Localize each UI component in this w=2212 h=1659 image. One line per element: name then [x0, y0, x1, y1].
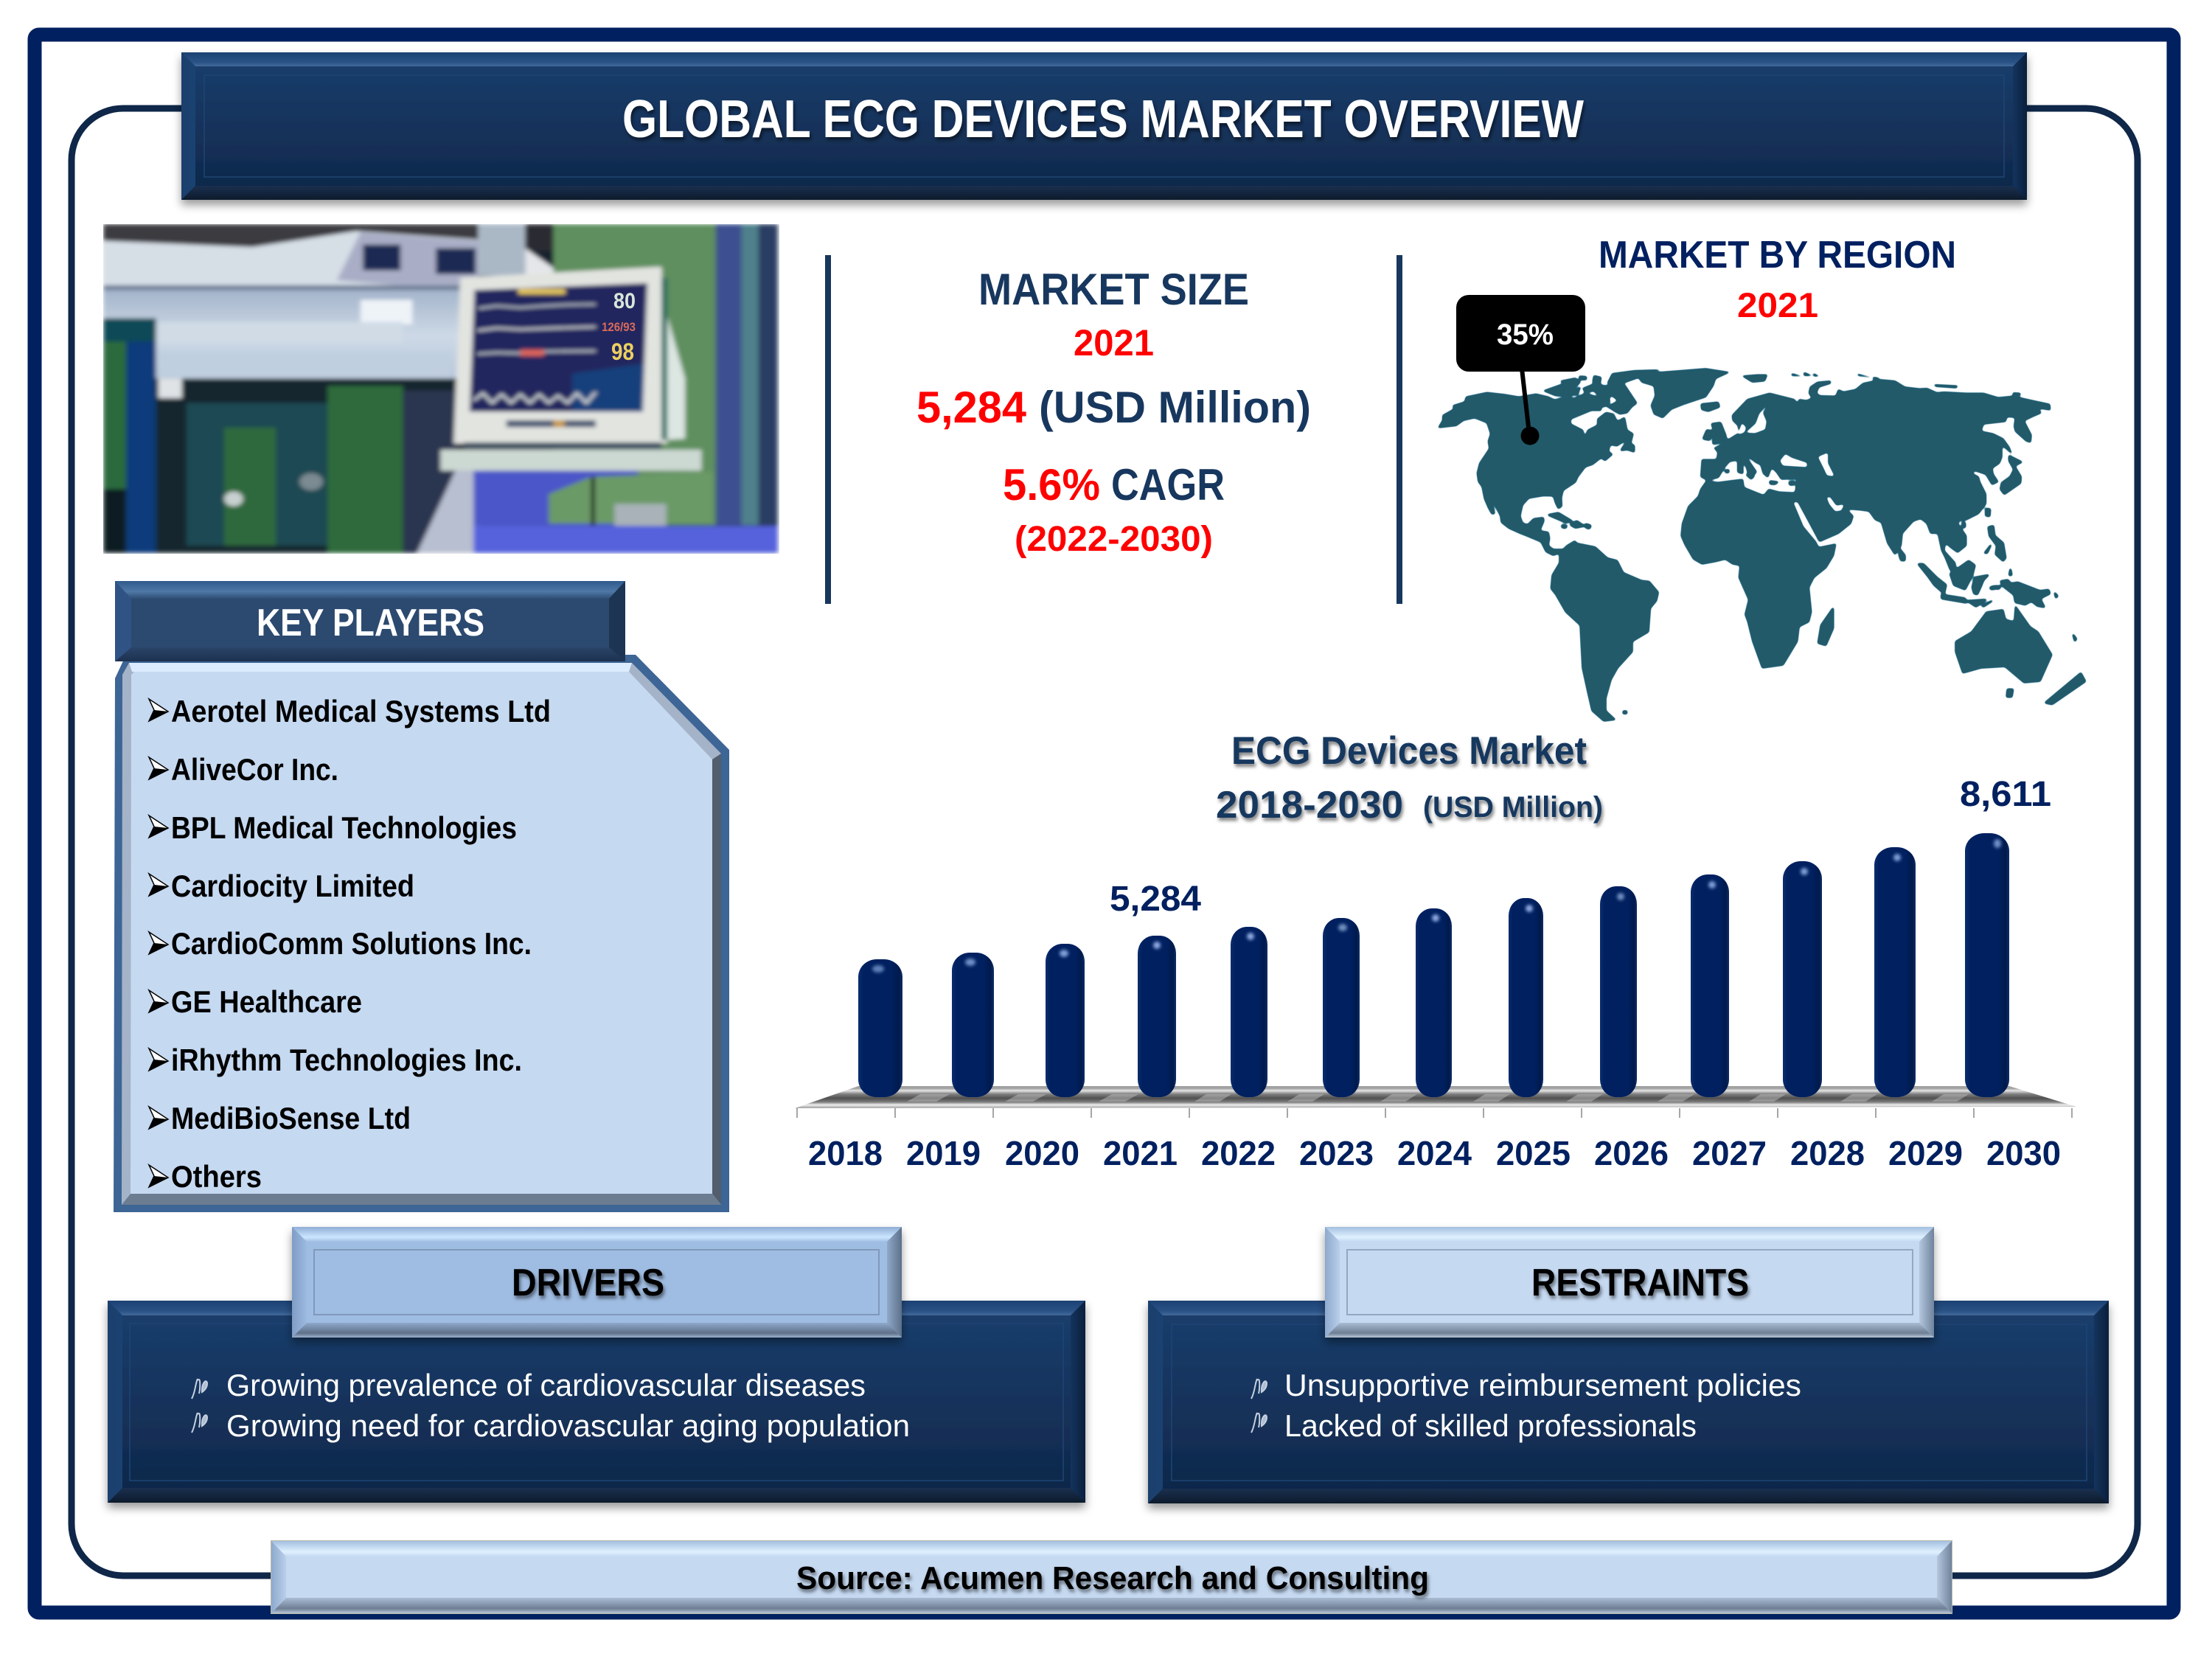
player 5: CardioComm Solutions Inc.	[171, 926, 532, 961]
title banner	[181, 52, 2027, 200]
bar 2018	[858, 959, 902, 1097]
callout pointer	[1520, 369, 1540, 445]
land: eurasia	[1701, 380, 2051, 573]
bar 2021	[1138, 936, 1176, 1097]
panel: drivers	[108, 1301, 1085, 1503]
world map	[1423, 361, 2107, 736]
year: 2021	[1074, 322, 1154, 364]
year axis labels: 2021	[1103, 1134, 1178, 1172]
source bar	[271, 1541, 1952, 1613]
player 3: BPL Medical Technologies	[171, 810, 517, 845]
year axis labels: 2026	[1594, 1134, 1669, 1172]
panel heading: key players	[115, 581, 625, 661]
monitor readings: 98	[611, 338, 634, 365]
restraints text 2: Lacked of skilled professionals	[1284, 1408, 1697, 1443]
bar 2029	[1874, 847, 1916, 1097]
bar 2019	[952, 953, 994, 1097]
restraints text 1: Unsupportive reimbursement policies	[1284, 1368, 1801, 1402]
restraints bullet 1	[1251, 1379, 1267, 1399]
water: inland seas	[1610, 407, 1843, 546]
bar 2026	[1600, 886, 1637, 1097]
title text: GLOBAL ECG DEVICES MARKET OVERVIEW	[622, 90, 1584, 149]
panel heading: restraints	[1325, 1227, 1934, 1338]
monitor readings: 126/93	[602, 320, 636, 334]
bar chart	[795, 775, 2076, 1172]
bar 2020	[1046, 944, 1085, 1097]
value label 2021: 5,284	[1110, 880, 1201, 919]
bar 2027	[1691, 874, 1729, 1097]
bar 2023	[1323, 918, 1360, 1097]
divider left	[825, 255, 831, 604]
photo: patient monitor	[103, 224, 778, 553]
land: south america	[1551, 540, 1658, 721]
player 7: iRhythm Technologies Inc.	[171, 1043, 522, 1077]
year axis labels: 2025	[1496, 1134, 1571, 1172]
callout value: 35%	[1497, 319, 1554, 351]
year axis labels: 2030	[1986, 1134, 2061, 1172]
land: australia	[1955, 606, 2052, 683]
chart title line 2: 2018-2030	[1216, 784, 1403, 827]
drivers text: DRIVERS	[512, 1262, 664, 1304]
panel: restraints	[1148, 1301, 2109, 1503]
heading: market by region: MARKET BY REGION	[1599, 234, 1956, 276]
year axis labels: 2029	[1888, 1134, 1963, 1172]
year axis labels	[808, 1134, 2061, 1172]
cagr: 5.6%	[1003, 460, 1100, 509]
panel heading: drivers	[292, 1227, 902, 1338]
panel: key players list	[114, 655, 729, 1212]
year axis labels: 2018	[808, 1134, 883, 1172]
drivers text 2: Growing need for cardiovascular aging population	[226, 1408, 910, 1443]
cagr period: (2022-2030)	[1015, 520, 1213, 559]
year axis labels: 2027	[1692, 1134, 1767, 1172]
value label 2030: 8,611	[1960, 775, 2051, 814]
restraints bullet 2	[1251, 1413, 1267, 1433]
land: africa	[1681, 481, 1836, 668]
key player entries	[149, 694, 551, 1194]
player 1: Aerotel Medical Systems Ltd	[171, 694, 551, 728]
key players text: KEY PLAYERS	[257, 602, 484, 644]
player 9: Others	[171, 1159, 262, 1194]
heading: market size: MARKET SIZE	[978, 265, 1249, 314]
callout box	[1456, 295, 1585, 372]
land: greenland	[1639, 369, 1729, 418]
year axis labels: 2020	[1005, 1134, 1079, 1172]
chart floor	[795, 1086, 2076, 1118]
cagr label: CAGR	[1111, 460, 1225, 509]
source text: Source: Acumen Research and Consulting	[796, 1560, 1429, 1596]
year axis labels: 2022	[1201, 1134, 1276, 1172]
bar 2022	[1231, 927, 1267, 1097]
monitor readings	[602, 293, 636, 360]
bar 2025	[1509, 898, 1543, 1097]
drivers text 1: Growing prevalence of cardiovascular diseases	[226, 1368, 866, 1402]
chart unit: (USD Million)	[1423, 791, 1603, 824]
chart heading	[1216, 729, 1603, 827]
callout: north america share	[1456, 295, 1585, 445]
chart title line 1: ECG Devices Market	[1231, 729, 1587, 773]
region year: 2021	[1737, 285, 1818, 324]
land: north america	[1439, 392, 1635, 555]
year axis labels: 2019	[906, 1134, 981, 1172]
player 4: Cardiocity Limited	[171, 869, 414, 903]
land: arctic islands	[1543, 370, 2020, 414]
value unit: (USD Million)	[1039, 383, 1311, 432]
year axis labels: 2028	[1790, 1134, 1865, 1172]
bar 2028	[1783, 861, 1822, 1097]
player 6: GE Healthcare	[171, 984, 362, 1019]
year axis labels: 2023	[1299, 1134, 1374, 1172]
value: 5,284	[917, 383, 1027, 432]
drivers bullet 2	[192, 1413, 207, 1433]
drivers bullet 1	[192, 1379, 207, 1399]
land: island groups	[1548, 403, 2085, 714]
monitor readings: 80	[613, 289, 636, 313]
restraints heading text: RESTRAINTS	[1531, 1262, 1749, 1304]
player 2: AliveCor Inc.	[171, 752, 338, 787]
bar 2030	[1965, 833, 2009, 1097]
market size block	[917, 265, 1311, 559]
year axis labels: 2024	[1397, 1134, 1472, 1172]
divider right	[1397, 255, 1402, 604]
bar 2024	[1416, 908, 1452, 1097]
player 8: MediBioSense Ltd	[171, 1101, 411, 1135]
